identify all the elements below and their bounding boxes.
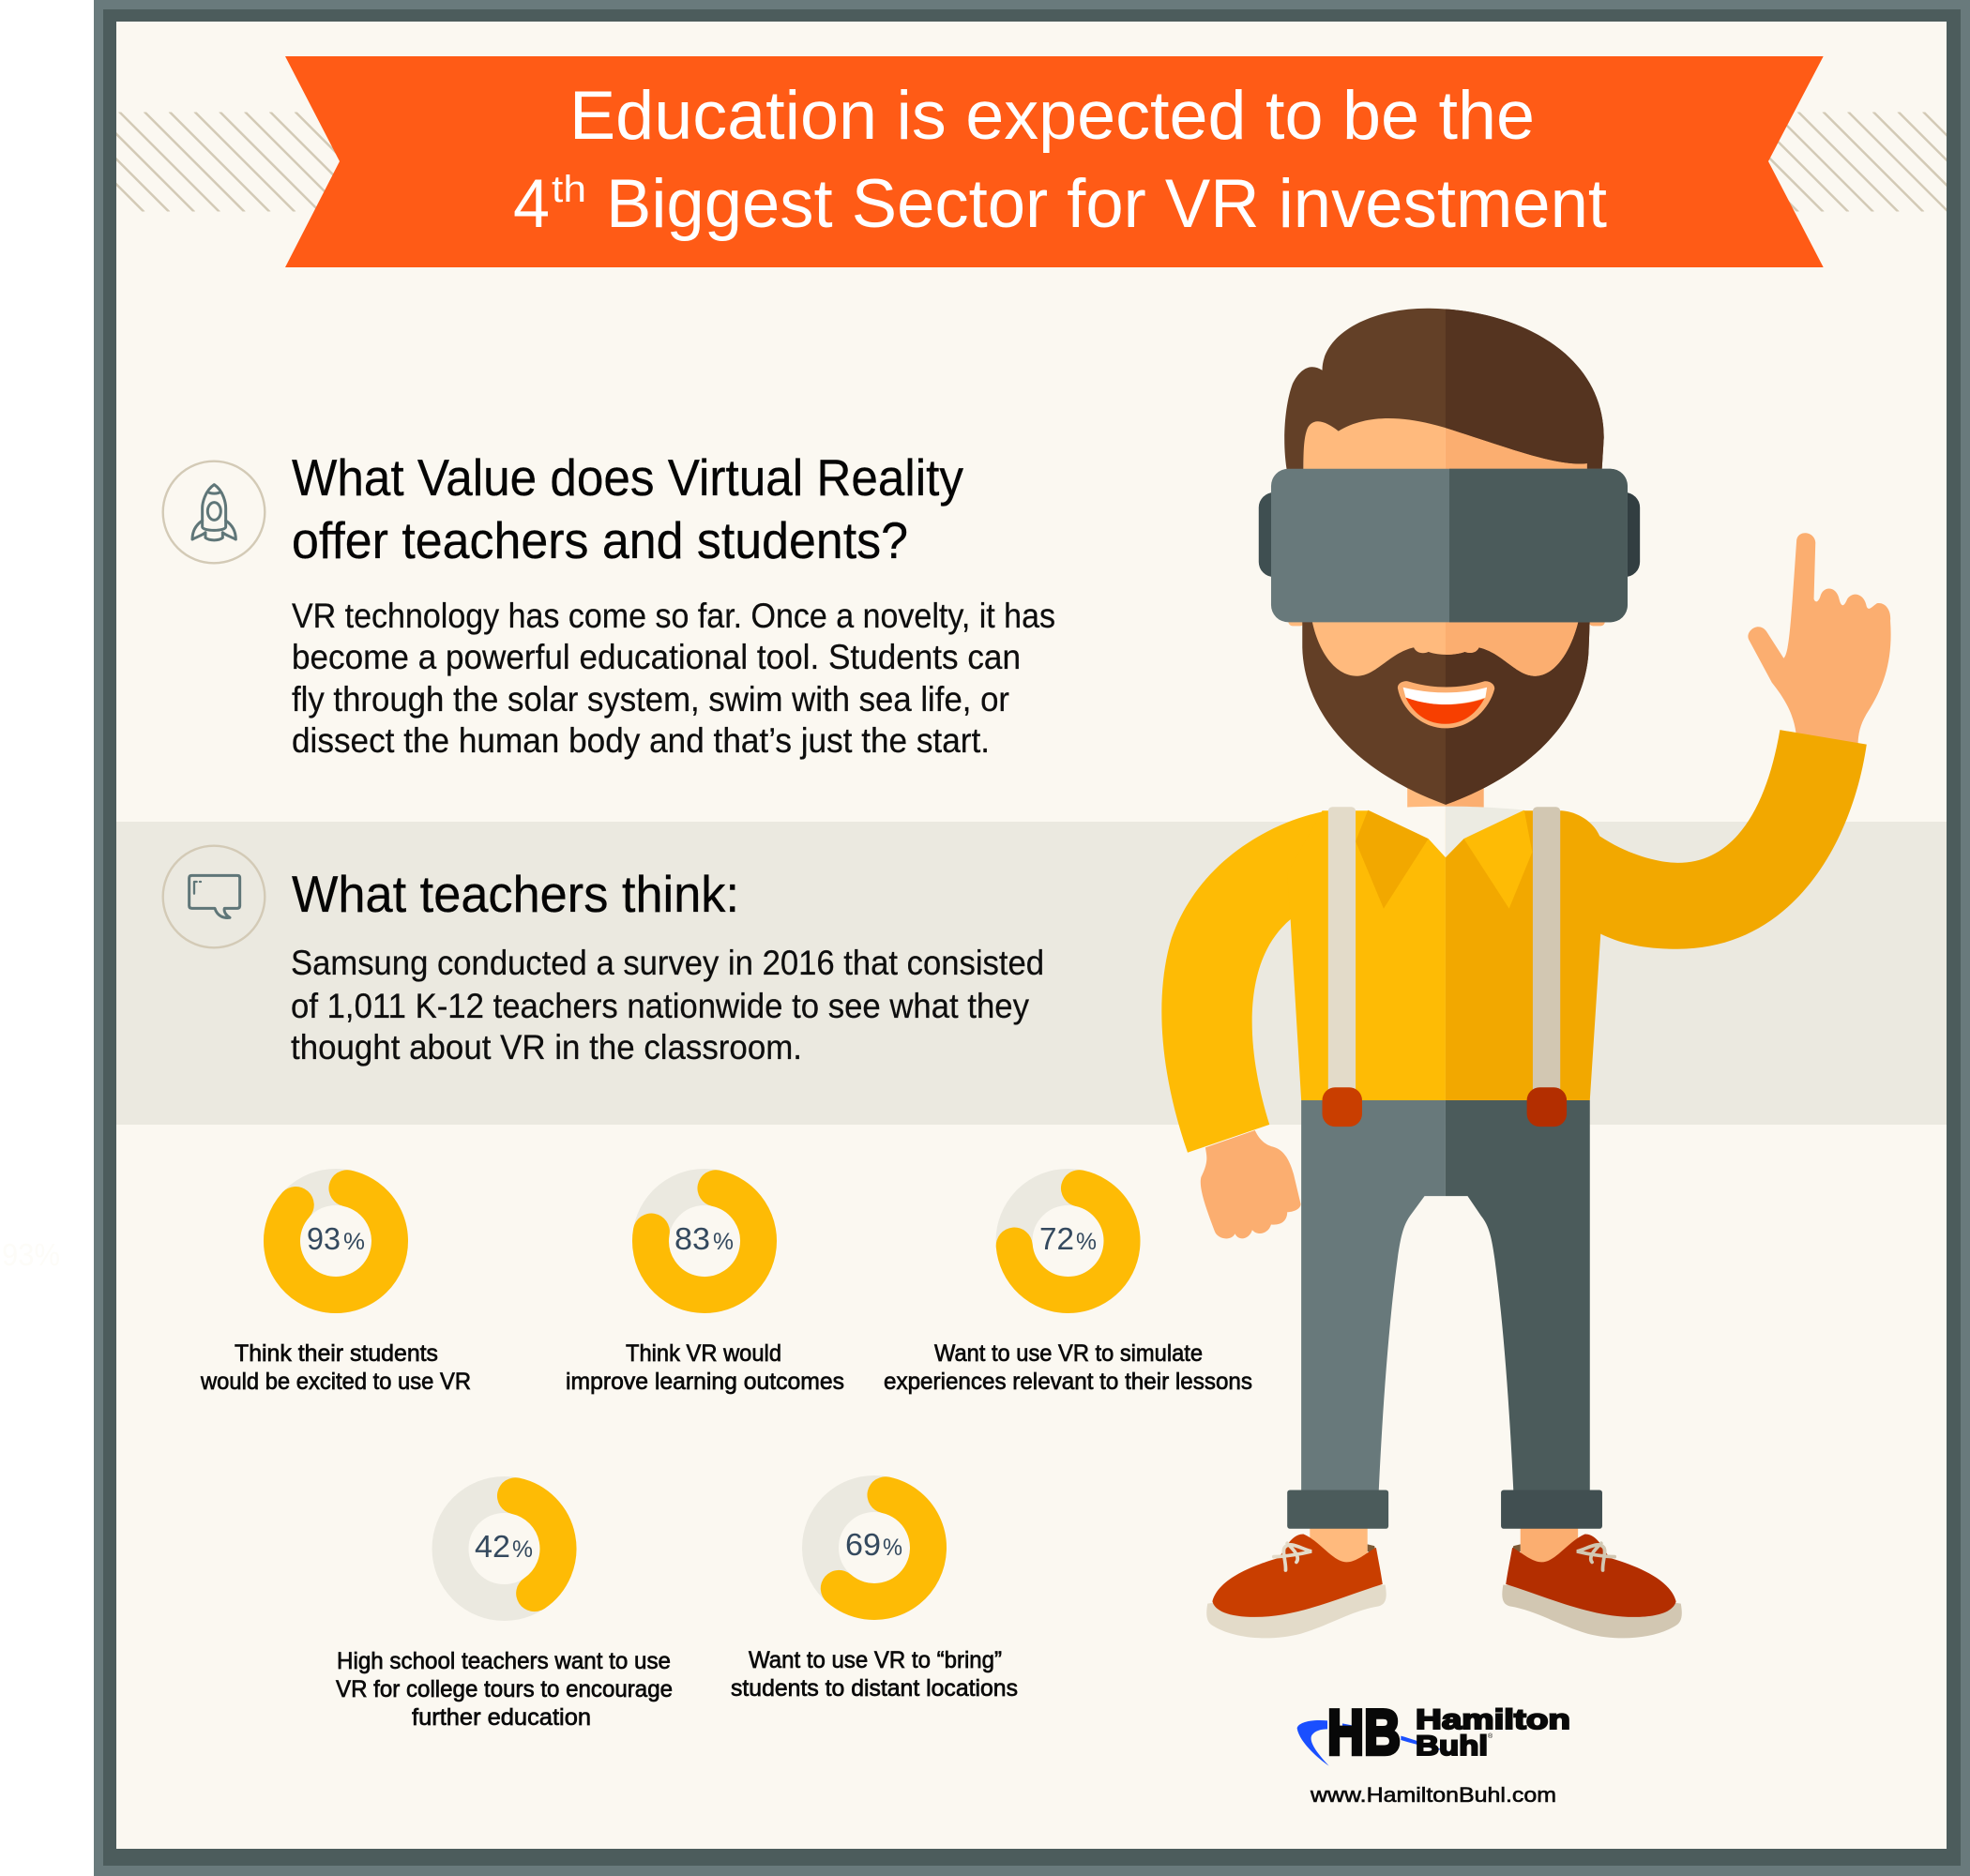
donut chart: 72%: experiences relevant to their lessons <box>884 1369 1252 1395</box>
heading: teachers: What teachers think: <box>292 865 739 923</box>
donut chart: 83%: improve learning outcomes <box>566 1369 844 1395</box>
donut chart: 83%: Think VR would <box>626 1340 781 1367</box>
donut chart: 83% <box>566 1188 844 1395</box>
logo: Hamilton Buhl: Buhl <box>1416 1731 1488 1762</box>
icon: speech bubble <box>163 846 265 947</box>
panel: what teachers think <box>163 846 1044 1067</box>
text block: value body: VR technology has come so far. Once a novelty, it has <box>292 597 1055 635</box>
donut chart: 72%: % <box>1076 1229 1097 1255</box>
text block: value body <box>292 597 1055 760</box>
head <box>1284 309 1605 805</box>
text block: survey body <box>291 944 1044 1067</box>
ankles and shoes <box>1206 1490 1682 1638</box>
donut chart: 93%: % <box>343 1229 365 1255</box>
donut chart: 93%: would be excited to use VR <box>200 1369 471 1395</box>
heading: value: offer teachers and students? <box>292 511 908 569</box>
donut chart: 93%: Think their students <box>235 1340 438 1367</box>
heading: value <box>292 448 963 569</box>
donut chart: 42%: 42 <box>475 1529 510 1564</box>
logo: Hamilton Buhl: ® <box>1488 1732 1493 1740</box>
donut chart: 72%: 72 <box>1039 1221 1074 1256</box>
website address: www.HamiltonBuhl.com <box>1310 1783 1556 1807</box>
donut chart: 93%: 93 <box>307 1221 341 1256</box>
banner title: Biggest Sector for VR investment <box>606 166 1607 242</box>
raised hand <box>1748 533 1891 745</box>
banner title: th <box>552 169 586 210</box>
donut chart: 69%: % <box>883 1535 902 1561</box>
trousers <box>1301 1100 1590 1490</box>
text block: value body: fly through the solar system, swim with sea life, or <box>292 680 1009 719</box>
text block: value body: dissect the human body and that’s just the start. <box>292 721 990 760</box>
neck and collar <box>1356 782 1532 909</box>
left hand <box>1201 1130 1301 1238</box>
donut chart: 72%: Want to use VR to simulate <box>934 1340 1203 1367</box>
logo: Hamilton Buhl <box>1297 1697 1570 1768</box>
shirt and arms <box>1161 730 1867 1153</box>
banner title <box>285 56 1824 267</box>
donut chart: 42%: % <box>512 1536 533 1563</box>
logo: Hamilton Buhl: HB <box>1327 1697 1401 1768</box>
icon: rocket <box>163 461 265 563</box>
text block: survey body: thought about VR in the classroom. <box>291 1028 802 1067</box>
donut chart: 42% <box>336 1495 673 1731</box>
text block: survey body: Samsung conducted a survey in 2016 that consisted <box>291 944 1044 982</box>
suspenders and clips <box>1323 807 1567 1127</box>
panel: value of virtual reality <box>163 448 1055 760</box>
donut chart: 42%: further education <box>412 1704 591 1731</box>
logo: Hamilton Buhl: Hamilton <box>1416 1704 1570 1735</box>
donut chart: 69%: 69 <box>845 1527 881 1562</box>
donut chart: 83%: 83 <box>674 1221 710 1256</box>
donut chart: 93% <box>200 1188 471 1395</box>
donut chart: 69%: students to distant locations <box>731 1675 1018 1702</box>
infographic: 93% <box>2 1237 60 1272</box>
donut chart: 69% <box>731 1493 1018 1702</box>
banner title: Education is expected to be the <box>569 78 1535 154</box>
donut chart: 42%: High school teachers want to use <box>337 1648 671 1674</box>
donut chart: 72% <box>884 1188 1252 1395</box>
text block: value body: become a powerful educational tool. Students can <box>292 638 1021 676</box>
heading: value: What Value does Virtual Reality <box>292 448 963 507</box>
illustration: man wearing VR headset <box>1161 309 1891 1638</box>
banner title: 4 <box>513 166 550 242</box>
donut chart: 42%: VR for college tours to encourage <box>336 1676 673 1702</box>
donut chart: 83%: % <box>713 1229 734 1255</box>
text block: survey body: of 1,011 K-12 teachers nationwide to see what they <box>291 987 1029 1025</box>
VR headset <box>1259 469 1640 622</box>
donut chart: 69%: Want to use VR to “bring” <box>749 1647 1002 1673</box>
